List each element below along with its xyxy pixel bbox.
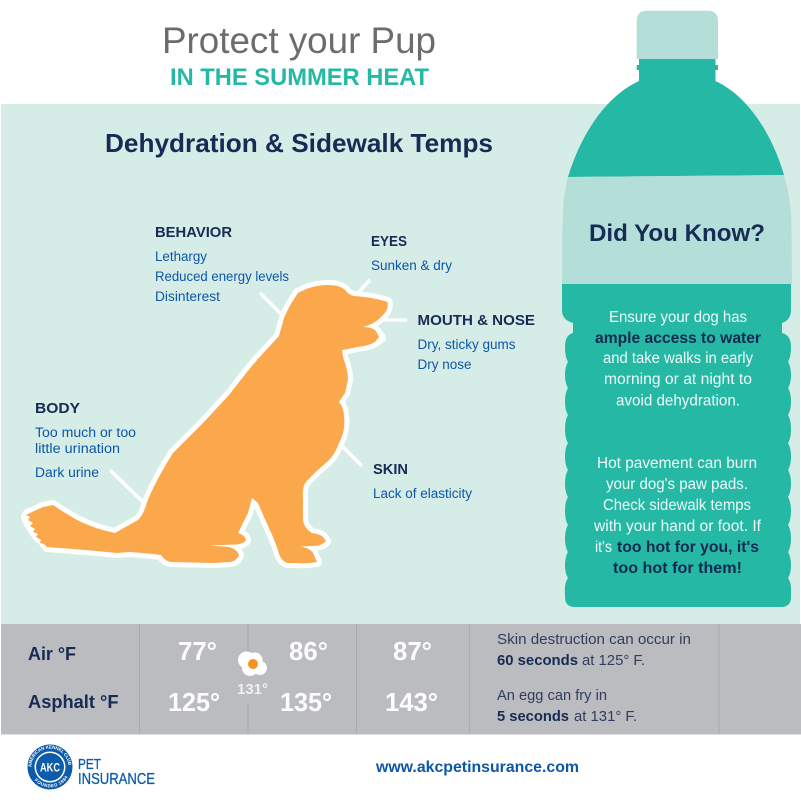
label: behavior: BEHAVIOR [155, 224, 232, 241]
asphalt temperatures: 143° [385, 687, 438, 717]
fact: skin destruction: 60 seconds [497, 653, 578, 669]
label: mouth and nose: Dry, sticky gums [418, 337, 516, 352]
panel: dehydration background [1, 104, 800, 624]
bottle label band [562, 175, 792, 284]
label: mouth and nose [418, 312, 535, 372]
logo: AKC Pet Insurance: FOUNDED 1884 [34, 776, 68, 788]
label: behavior: Lethargy [155, 249, 207, 264]
fact: skin destruction: at 125° F. [582, 653, 645, 669]
label: eyes: EYES [371, 233, 407, 250]
callout text: water access: Ensure your dog has [609, 309, 747, 326]
row labels: Air °F [28, 644, 76, 664]
callout text: water access: and take walks in early [603, 350, 753, 367]
row labels: Asphalt °F [28, 692, 119, 712]
panel: water bottle [562, 11, 792, 607]
callout text: hot pavement: too hot for you, it's [617, 539, 759, 556]
callout text: hot pavement [593, 455, 762, 577]
label: skin [373, 461, 472, 501]
fact: egg fry: An egg can fry in [497, 688, 607, 704]
label: behavior: Reduced energy levels [155, 269, 289, 284]
logo: AKC Pet Insurance: INSURANCE [78, 771, 155, 788]
callout text: hot pavement: Hot pavement can burn [597, 455, 757, 472]
logo: AKC Pet Insurance: PET [78, 756, 101, 773]
label: skin: Lack of elasticity [373, 486, 472, 501]
label: skin: SKIN [373, 461, 408, 478]
label: mouth and nose: Dry nose [418, 357, 472, 372]
label: mouth and nose: MOUTH & NOSE [418, 312, 535, 329]
air temperatures [178, 636, 432, 666]
callout text: hot pavement: with your hand or foot. If [593, 518, 762, 535]
label: eyes [371, 233, 452, 273]
illustration: dog silhouette with pointer lines [26, 280, 407, 563]
air temperatures: 86° [289, 636, 328, 666]
website url: www.akcpetinsurance.com [375, 759, 579, 776]
callout text: water access: morning or at night to [604, 371, 752, 388]
row labels [28, 644, 119, 712]
logo: AKC Pet Insurance: AKC [40, 762, 60, 774]
callout text: water access: ample access to water [595, 330, 761, 347]
label: behavior [155, 224, 289, 304]
fact: skin destruction [497, 632, 691, 669]
logo: AKC Pet Insurance [28, 744, 155, 790]
fact: skin destruction: Skin destruction can occur in [497, 632, 691, 648]
title [162, 20, 436, 91]
air temperatures: 87° [393, 636, 432, 666]
label: body: little urination [35, 441, 120, 456]
callout text: hot pavement: Check sidewalk temps [603, 497, 751, 514]
asphalt temperatures [168, 687, 438, 717]
egg temperature: 131° [237, 682, 268, 698]
panel: temperature table [1, 624, 801, 734]
callout text: water access: avoid dehydration. [616, 392, 740, 410]
label: body [35, 400, 136, 480]
title: IN THE SUMMER HEAT [170, 64, 429, 91]
label: body: BODY [35, 400, 80, 417]
bottle neck and shoulder [568, 59, 784, 177]
heading: dehydration and sidewalk temps: Dehydration & Sidewalk Temps [105, 128, 493, 158]
fact: egg fry [497, 688, 637, 725]
asphalt temperatures: 125° [168, 687, 220, 717]
callout heading: Did You Know? [589, 220, 765, 247]
fact: egg fry: 5 seconds [497, 709, 569, 725]
callout text: water access [595, 309, 761, 410]
label: behavior: Disinterest [155, 289, 220, 304]
callout text: hot pavement: too hot for them! [613, 560, 742, 577]
label: body: Too much or too [35, 425, 136, 440]
bottle cap [637, 11, 718, 59]
icon: fried egg [238, 652, 267, 676]
callout text: hot pavement: your dog's paw pads. [606, 476, 748, 493]
title: Protect your Pup [162, 20, 436, 61]
callout text: hot pavement: it's [595, 539, 612, 556]
asphalt temperatures: 135° [280, 687, 332, 717]
fact: egg fry: at 131° F. [574, 709, 637, 725]
bottle body [562, 284, 791, 607]
logo: AKC Pet Insurance: AMERICAN KENNEL CLUB [28, 745, 72, 767]
label: eyes: Sunken & dry [371, 258, 452, 273]
label: body: Dark urine [35, 465, 99, 480]
air temperatures: 77° [178, 636, 217, 666]
